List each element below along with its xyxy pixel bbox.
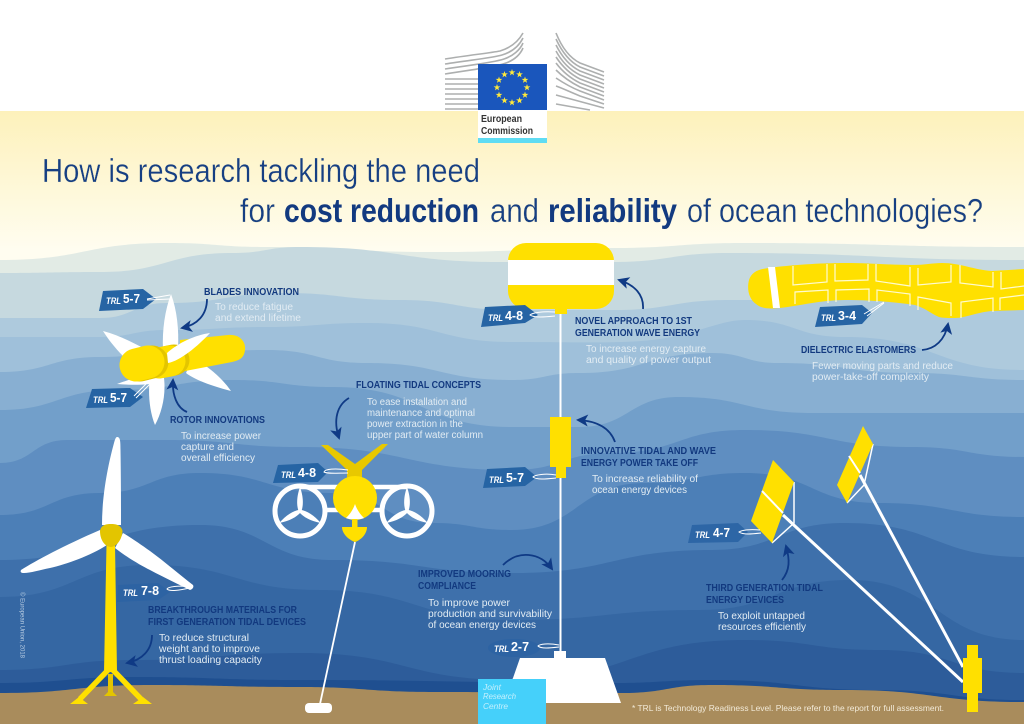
callout: dielectric elastomers: DIELECTRIC ELASTOMERS <box>801 345 916 356</box>
tag: TRL 4-8 floating <box>273 463 348 483</box>
mooring line <box>560 310 562 655</box>
title <box>42 153 983 230</box>
callout: rotor innovations: ROTOR INNOVATIONS <box>170 415 265 426</box>
callout: dielectric elastomers: Fewer moving parts and reduce <box>812 361 953 372</box>
background: sea waves <box>0 243 1024 724</box>
tag: TRL 2-7: 2-7 <box>511 639 529 654</box>
right rotor <box>382 486 432 536</box>
tag: TRL 5-7 blades: TRL <box>106 296 121 306</box>
title: of ocean technologies? <box>687 193 983 230</box>
tower <box>104 545 117 672</box>
callout: mooring compliance <box>418 555 552 631</box>
callout: floating tidal concepts: maintenance and optimal <box>367 408 475 419</box>
anchor <box>963 645 982 712</box>
tag: TRL 2-7: TRL <box>494 644 509 654</box>
icon: Berlaymont building <box>445 33 604 110</box>
logo text: European <box>481 114 522 125</box>
tag: TRL 3-4: TRL <box>821 313 836 323</box>
hull <box>321 444 388 480</box>
callout: blades innovation: BLADES INNOVATION <box>204 287 299 298</box>
tag: TRL 4-7: TRL <box>695 530 710 540</box>
tag: TRL 7-8: TRL <box>123 588 138 598</box>
blades behind nacelle <box>103 294 231 425</box>
kite struts <box>772 444 873 543</box>
callout: mooring compliance: of ocean energy devices <box>428 620 536 631</box>
callout: floating tidal concepts: power extraction in the <box>367 419 463 430</box>
callout: novel approach: and quality of power output <box>586 355 711 366</box>
callout: novel approach: NOVEL APPROACH TO 1ST <box>575 316 692 327</box>
tag: TRL 4-8 floating: 4-8 <box>298 465 316 480</box>
badge: Joint Research Centre: Research <box>483 691 516 701</box>
tag: TRL 5-7 power take off <box>483 467 556 488</box>
tag: TRL 5-7 blades: 5-7 <box>123 291 140 306</box>
background: sky <box>0 111 1024 271</box>
device: floating tidal platform <box>275 444 432 713</box>
device: dielectric elastomer snake <box>748 263 1024 318</box>
callout: power take off: ENERGY POWER TAKE OFF <box>581 458 698 469</box>
logo text <box>481 114 533 137</box>
nacelle <box>180 335 245 372</box>
callout: power take off: ocean energy devices <box>592 485 687 496</box>
tag: TRL 4-7 <box>688 523 761 543</box>
callout: power take off: To increase reliability of <box>592 474 698 485</box>
tag: TRL 7-8 <box>117 583 190 602</box>
kite one <box>751 460 794 543</box>
title: for <box>240 193 275 230</box>
tag: TRL 2-7 <box>488 639 559 657</box>
power take off <box>550 417 571 467</box>
callout: breakthrough materials: FIRST GENERATION TIDAL DEVICES <box>148 617 306 628</box>
callout: power take off <box>578 420 716 496</box>
callout: dielectric elastomers: power-take-off complexity <box>812 372 929 383</box>
callout: novel approach <box>575 280 711 366</box>
callout: floating tidal concepts <box>336 380 483 441</box>
callout: breakthrough materials: weight and to improve <box>158 644 260 655</box>
tag: TRL 4-8 buoy <box>481 305 555 327</box>
callout: floating tidal concepts: To ease installation and <box>367 397 467 408</box>
tag: TRL 4-7: 4-7 <box>713 525 730 540</box>
device: first generation tidal turbine <box>21 437 193 704</box>
tag: TRL 7-8: 7-8 <box>141 583 159 598</box>
callout: third generation: To exploit untapped <box>718 611 805 622</box>
tag: TRL 5-7 blades <box>99 289 170 311</box>
label box <box>478 110 547 138</box>
cell outlines <box>793 264 1024 318</box>
copyright: © European Union, 2018 <box>18 592 26 658</box>
device: twin-rotor tidal turbine <box>103 294 245 425</box>
tag: TRL 5-7 power take off: 5-7 <box>506 470 524 485</box>
device: third generation tidal kites <box>751 426 982 712</box>
callout: third generation: ENERGY DEVICES <box>706 595 784 606</box>
badge: Joint Research Centre <box>478 679 546 724</box>
rotor blades <box>102 437 121 525</box>
callout: dielectric elastomers <box>801 324 953 383</box>
white band <box>768 267 780 308</box>
kite two <box>837 426 873 503</box>
buoy body <box>508 243 614 309</box>
callout: third generation <box>706 546 823 633</box>
title: cost reduction <box>284 193 479 230</box>
seabed foundation <box>500 651 621 703</box>
badge: Joint Research Centre: Centre <box>483 701 508 711</box>
callout: blades innovation <box>182 287 301 328</box>
tag: TRL 5-7 rotor <box>86 380 153 408</box>
hub <box>100 524 122 547</box>
title: reliability <box>548 193 677 230</box>
badge: Joint Research Centre: Joint <box>482 682 502 692</box>
callout: floating tidal concepts: upper part of water column <box>367 430 483 441</box>
mooring line <box>320 542 355 704</box>
callout: mooring compliance: production and survivability <box>428 609 552 620</box>
callout: breakthrough materials: BREAKTHROUGH MATERIALS FOR <box>148 605 298 616</box>
base legs <box>80 668 141 699</box>
title: How is research tackling the need <box>42 153 480 190</box>
callout: breakthrough materials <box>127 605 306 666</box>
tag: TRL 5-7 power take off: TRL <box>489 475 504 485</box>
callout: rotor innovations: To increase power <box>181 431 262 442</box>
callout: novel approach: To increase energy capture <box>586 344 706 355</box>
callout: power take off: INNOVATIVE TIDAL AND WAVE <box>581 446 716 457</box>
callout: third generation: THIRD GENERATION TIDAL <box>706 583 823 594</box>
icon: EU flag <box>478 64 547 110</box>
callout: rotor innovations: capture and <box>181 442 234 453</box>
callout: rotor innovations <box>170 380 265 464</box>
frame <box>300 487 407 510</box>
tag: TRL 4-8 floating: TRL <box>281 470 296 480</box>
left rotor <box>275 486 325 536</box>
tag: TRL 3-4: 3-4 <box>838 308 857 323</box>
seabed <box>0 685 1024 724</box>
callout: third generation: resources efficiently <box>718 622 806 633</box>
title: and <box>490 193 539 230</box>
callout: blades innovation: To reduce fatigue <box>215 302 293 313</box>
device: wave energy buoy <box>500 243 621 703</box>
callout: rotor innovations: overall efficiency <box>181 453 255 464</box>
callout: floating tidal concepts: FLOATING TIDAL CONCEPTS <box>356 380 481 391</box>
callout: mooring compliance: IMPROVED MOORING <box>418 569 511 580</box>
tag: TRL 5-7 rotor: 5-7 <box>110 390 127 405</box>
callout: mooring compliance: COMPLIANCE <box>418 581 476 592</box>
callout: blades innovation: and extend lifetime <box>215 313 301 324</box>
front blade <box>167 333 210 363</box>
tag: TRL 4-8 buoy: TRL <box>488 313 503 323</box>
callout: breakthrough materials: thrust loading capacity <box>159 655 262 666</box>
tether cables <box>783 475 963 682</box>
tag: TRL 3-4 <box>815 302 884 327</box>
logo text: Commission <box>481 126 533 137</box>
anchor <box>305 703 332 713</box>
callout: breakthrough materials: To reduce structural <box>159 633 249 644</box>
tag: TRL 4-8 buoy: 4-8 <box>505 308 523 323</box>
callout: mooring compliance: To improve power <box>428 598 511 609</box>
tag: TRL 5-7 rotor: TRL <box>93 395 108 405</box>
callout: novel approach: GENERATION WAVE ENERGY <box>575 328 700 339</box>
footnote: * TRL is Technology Readiness Level. Please refer to the report for full assessment. <box>632 703 944 713</box>
logo: European Commission <box>445 33 604 143</box>
